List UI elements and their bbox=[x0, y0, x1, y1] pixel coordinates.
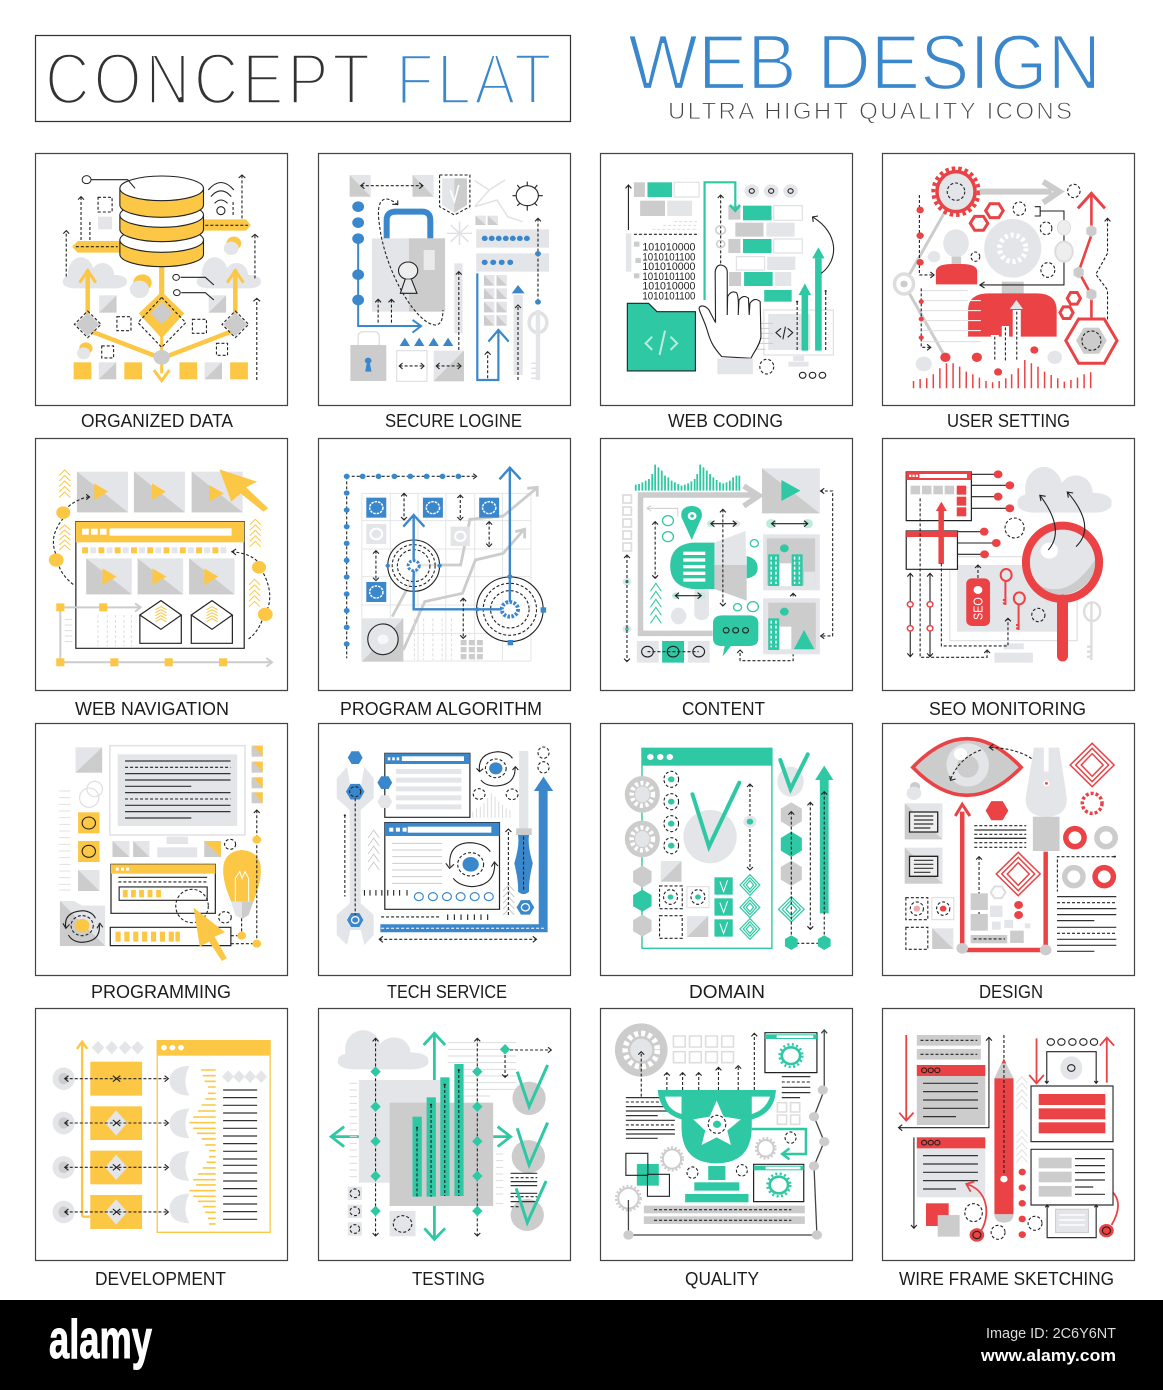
label: TECH SERVICE bbox=[387, 981, 507, 1002]
red arrow chain bbox=[1074, 193, 1105, 320]
chevrons bbox=[368, 830, 514, 915]
icon: cloud bbox=[1017, 467, 1112, 513]
panel: organized data bbox=[36, 154, 288, 406]
footer bar: alamy bbox=[49, 1308, 152, 1370]
label: CONTENT bbox=[682, 698, 765, 719]
label: DEVELOPMENT bbox=[95, 1268, 226, 1289]
label: TESTING bbox=[412, 1268, 485, 1289]
red down arrow bbox=[899, 1035, 914, 1121]
monitor with code bbox=[110, 746, 245, 857]
gray blocks bbox=[971, 887, 1030, 943]
rotating folder bbox=[60, 901, 105, 946]
text lines bbox=[974, 826, 1116, 951]
gray key bbox=[1084, 602, 1100, 660]
dashed connectors bbox=[976, 856, 1116, 925]
panel: wire frame sketching bbox=[882, 1008, 1134, 1260]
panel: user setting bbox=[882, 154, 1134, 406]
three dots bbox=[744, 184, 798, 198]
monitor and arrows bbox=[738, 216, 834, 367]
icon: wrench bbox=[337, 751, 374, 945]
dashed axes with diamonds bbox=[370, 1038, 551, 1236]
heading: web design: WEB DESIGN bbox=[628, 19, 1101, 106]
red gear bbox=[933, 168, 979, 215]
panel: development bbox=[36, 1008, 288, 1260]
yellow arrow and diamonds bbox=[77, 1041, 144, 1217]
dashed double arrows bbox=[373, 493, 492, 638]
video tiles bbox=[77, 472, 243, 512]
box with gray blocks bbox=[1031, 1149, 1113, 1205]
icon: trophy bbox=[658, 1090, 776, 1202]
panel: program algorithm bbox=[318, 438, 570, 690]
window gear bottom bbox=[754, 1164, 804, 1202]
icon: light bulb bbox=[223, 850, 261, 919]
hexagons left bbox=[633, 861, 708, 937]
panel: tech service bbox=[318, 724, 570, 976]
icon: map pin bbox=[681, 506, 702, 540]
yellow flow arrows bbox=[80, 270, 243, 381]
overlapping squares and dashed circles bbox=[926, 1203, 1042, 1239]
label: PROGRAMMING bbox=[91, 981, 231, 1002]
small document box bbox=[1045, 1205, 1098, 1238]
clouds bbox=[63, 257, 261, 288]
red nut bbox=[1066, 319, 1117, 363]
icon: cursor bbox=[194, 908, 227, 961]
check tiles bbox=[714, 877, 733, 937]
checks bbox=[511, 1065, 548, 1231]
left tiles bbox=[59, 747, 149, 891]
red hexagon bbox=[986, 801, 1008, 820]
equalizer bars bbox=[914, 360, 1091, 388]
left rail bbox=[626, 185, 699, 278]
play tile bbox=[762, 468, 820, 513]
gray panels bbox=[359, 1080, 493, 1206]
circles row and connectors bbox=[1029, 1038, 1114, 1083]
blue arrows bbox=[386, 468, 546, 645]
gray path with yellow squares bbox=[56, 603, 272, 667]
panel: domain bbox=[600, 724, 852, 976]
binary code text: 101010000 bbox=[642, 242, 695, 254]
panel: quality bbox=[600, 1008, 852, 1260]
yellow nodes with dashed curves bbox=[49, 494, 273, 640]
icon: magnifier bbox=[1026, 492, 1099, 656]
box with red bars bbox=[1031, 1086, 1113, 1142]
big check mark bbox=[683, 783, 739, 863]
gray path arrow bbox=[641, 486, 759, 633]
browser window two bbox=[906, 528, 1001, 569]
red keys bbox=[1001, 569, 1025, 630]
left squares bbox=[623, 495, 631, 551]
label: QUALITY bbox=[685, 1268, 759, 1289]
chevrons bbox=[59, 470, 261, 641]
top tiles and shield bbox=[350, 175, 470, 215]
refresh icon one bbox=[473, 752, 518, 818]
overlapping squares bbox=[626, 1153, 669, 1196]
password fields bbox=[476, 229, 549, 272]
target dots bbox=[664, 771, 679, 854]
bottom left gear tile bbox=[362, 618, 483, 662]
label: WEB NAVIGATION bbox=[75, 698, 229, 719]
icon: wifi bbox=[208, 182, 234, 215]
bar chart bbox=[413, 1064, 464, 1197]
red arrow bbox=[936, 502, 947, 564]
gray nodes bbox=[53, 1067, 75, 1223]
footer bar bbox=[0, 1300, 1163, 1390]
label: WIRE FRAME SKETCHING bbox=[899, 1268, 1114, 1289]
title box: concept flat bbox=[36, 36, 570, 122]
binary code text: 101010000 bbox=[642, 281, 695, 292]
gray key bbox=[529, 310, 547, 380]
gear tiles bbox=[366, 498, 499, 602]
label: DESIGN bbox=[979, 981, 1043, 1002]
seo tag: SEO bbox=[971, 597, 986, 620]
panel: secure logine bbox=[318, 154, 570, 406]
gray bars bbox=[917, 1035, 981, 1060]
double arrows bbox=[623, 488, 833, 662]
binary code text bbox=[642, 242, 695, 302]
network and sun bbox=[447, 180, 543, 245]
blue dotted axes bbox=[344, 474, 477, 658]
seo tag bbox=[966, 578, 990, 626]
icon: screwdriver bbox=[514, 751, 534, 915]
targets bbox=[388, 540, 543, 642]
gray gears bbox=[616, 1138, 776, 1211]
monitor bbox=[950, 557, 1077, 663]
label: SECURE LOGINE bbox=[385, 410, 522, 431]
icon: megaphone bbox=[670, 531, 758, 620]
diamonds bbox=[74, 292, 249, 365]
gray outline hexagon bbox=[895, 212, 945, 357]
persons bbox=[921, 219, 1057, 363]
building tile one bbox=[763, 534, 820, 590]
browser window bbox=[642, 748, 772, 948]
browser window bbox=[157, 1041, 270, 1232]
right column bbox=[777, 754, 833, 950]
panel: seo monitoring bbox=[882, 438, 1134, 690]
dashed arrows and connectors bbox=[63, 175, 260, 380]
dashed double arrows bbox=[65, 1076, 168, 1215]
small moons bbox=[77, 237, 241, 359]
dashed circles bbox=[1005, 518, 1045, 622]
building tile two bbox=[763, 598, 820, 654]
right yellow squares bbox=[204, 746, 263, 857]
gray trend arrows bbox=[392, 487, 537, 650]
target tiles bbox=[906, 898, 954, 949]
gray arrow bbox=[980, 182, 1059, 203]
icon: pencil bbox=[994, 1035, 1013, 1223]
small lock and tiles bbox=[350, 332, 464, 381]
label: USER SETTING bbox=[947, 410, 1070, 431]
teal audio bars bbox=[636, 465, 739, 491]
dashed circles bbox=[687, 1132, 796, 1178]
teal diamonds bbox=[740, 875, 804, 939]
label: WEB CODING bbox=[668, 410, 783, 431]
small gear tiles bbox=[348, 1187, 416, 1236]
dashed connectors and circles bbox=[919, 184, 1110, 350]
footer bar: www.alamy.com bbox=[980, 1346, 1116, 1365]
small bottom items bbox=[717, 358, 826, 378]
binary code text: 1010101100 bbox=[642, 252, 695, 264]
window two bbox=[364, 823, 500, 909]
label: SEO MONITORING bbox=[929, 698, 1086, 719]
rings bbox=[1065, 829, 1115, 886]
yellow tiles bbox=[90, 1062, 142, 1229]
gray bars bbox=[644, 1206, 805, 1224]
blue node line bbox=[352, 201, 421, 333]
label: DOMAIN bbox=[689, 981, 765, 1002]
icon: cloud bbox=[338, 1030, 428, 1069]
progress bar bbox=[110, 927, 231, 946]
code rows bbox=[634, 182, 802, 302]
bottom button row bbox=[637, 641, 710, 663]
red curved arrows bbox=[966, 1182, 1118, 1242]
small squares bbox=[673, 1036, 800, 1124]
teal connector arrow bbox=[705, 182, 740, 300]
panel: testing bbox=[318, 1008, 570, 1260]
title box: concept flat: CONCEPT bbox=[45, 40, 370, 120]
browser window one bbox=[906, 470, 1014, 521]
icon: pointing hand bbox=[699, 265, 761, 358]
big blue arrow bbox=[380, 777, 553, 932]
icon: database bbox=[72, 176, 251, 298]
icon: cursor bbox=[219, 469, 268, 512]
chevrons and circle bbox=[650, 583, 686, 624]
small tiles bbox=[905, 782, 942, 884]
dashed up arrows bbox=[638, 1033, 757, 1097]
panel: web coding bbox=[600, 154, 852, 406]
red frame arrow bbox=[955, 804, 1052, 955]
icon: padlock bbox=[372, 199, 445, 325]
icon: speech bubble bbox=[713, 615, 758, 657]
subtitle: ULTRA HIGHT QUALITY ICONS bbox=[668, 98, 1072, 125]
arrows left bbox=[907, 498, 1011, 657]
black arrows bbox=[899, 1037, 992, 1228]
window gear top bbox=[765, 1033, 817, 1073]
icon: pen nib bbox=[1026, 748, 1067, 851]
panel: design bbox=[882, 724, 1134, 976]
light grid bbox=[362, 493, 531, 661]
label: PROGRAM ALGORITHM bbox=[340, 698, 542, 719]
document two bbox=[917, 1137, 985, 1197]
text lines bbox=[626, 1077, 810, 1138]
small red hexagons bbox=[970, 204, 1080, 318]
icon: envelopes bbox=[140, 601, 232, 643]
chevrons bbox=[1016, 1077, 1027, 1162]
binary code text: 101010000 bbox=[642, 261, 695, 273]
rings and dots bbox=[662, 516, 758, 612]
light text lines bbox=[350, 1043, 516, 1203]
double arrow with dot bbox=[743, 784, 757, 870]
panel: programming bbox=[36, 724, 288, 976]
binary code text: 1010101100 bbox=[642, 291, 695, 302]
binary code text: 1010101100 bbox=[642, 271, 695, 283]
selection tiles bbox=[660, 886, 709, 938]
red diamonds and gear bbox=[996, 743, 1114, 896]
title box: concept flat: FLAT bbox=[396, 40, 552, 120]
big gray gear bbox=[615, 1023, 668, 1077]
panel: content bbox=[600, 438, 852, 690]
label: ORGANIZED DATA bbox=[81, 410, 234, 431]
left gears bbox=[625, 776, 660, 857]
browser window bbox=[76, 522, 244, 648]
icon: eye bbox=[913, 739, 1047, 795]
red and gray dots bbox=[916, 207, 1062, 376]
document one bbox=[917, 1065, 985, 1125]
teal cross arrows bbox=[331, 1033, 511, 1239]
connector path bbox=[623, 1030, 829, 1240]
browser window bbox=[111, 864, 215, 923]
dashed path bbox=[219, 810, 261, 948]
panel: web navigation bbox=[36, 438, 288, 690]
bottom dashes bbox=[379, 747, 549, 942]
teal return arrow bbox=[752, 1129, 806, 1159]
window one bbox=[377, 753, 470, 817]
footer bar: Image ID: 2C6Y6NT bbox=[986, 1325, 1116, 1342]
blue arrow and grid bbox=[454, 218, 541, 380]
red dots bbox=[1019, 1169, 1026, 1238]
bottom squares bbox=[74, 197, 248, 379]
icon: code folder bbox=[627, 303, 695, 371]
